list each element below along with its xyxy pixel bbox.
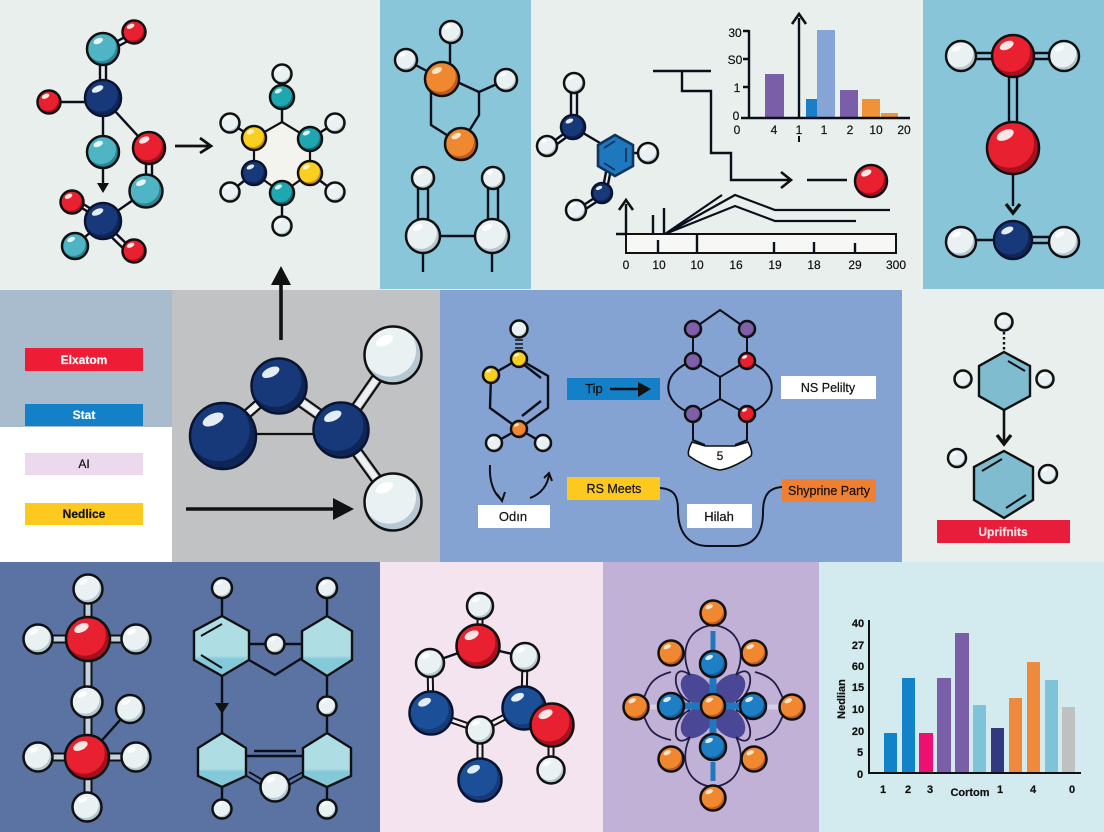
- axis labels: [728, 26, 911, 137]
- bars: [884, 633, 1075, 773]
- label: Hilah: Hilah: [704, 509, 734, 524]
- label: Tip with arrow: Tip: [585, 381, 603, 396]
- axis labels: 1: [880, 784, 886, 796]
- legend item: AI: AI: [78, 457, 90, 471]
- label: RS Meets: [567, 477, 660, 500]
- bar chart: top: [728, 14, 911, 142]
- line chart: bottom timeline: [616, 195, 906, 272]
- axis labels: 1: [734, 81, 741, 95]
- label: RS Meets: RS Meets: [587, 482, 641, 496]
- molecule: flow left ring: [482, 319, 551, 451]
- timeline labels: [623, 258, 906, 272]
- axis labels: 2: [905, 784, 911, 796]
- arrows: curved pair: [490, 465, 552, 501]
- panel: bottom pink background: [380, 562, 603, 832]
- axis labels: 15: [852, 682, 864, 694]
- label: Uprifnits: [937, 520, 1070, 543]
- axis labels: 20: [897, 123, 911, 137]
- label: Tip with arrow: [567, 378, 660, 400]
- molecule: large central navy and white: [188, 323, 422, 530]
- legend item: Elxatom: Elxatom: [61, 353, 107, 367]
- arrow: large right: [186, 498, 354, 520]
- axis labels: 4: [1030, 784, 1037, 796]
- molecule: six-membered ring: [220, 63, 344, 236]
- legend item: Nedlice: Nedlice: [63, 507, 106, 521]
- numbered shield: [688, 442, 752, 470]
- panel: blue flow background: [440, 290, 902, 562]
- label: Odin: Odın: [499, 509, 527, 524]
- axis labels: 1: [821, 123, 828, 137]
- timeline labels: 18: [807, 258, 821, 272]
- label: Hilah: [687, 504, 752, 528]
- panel: bottom chart background: [819, 562, 1104, 832]
- axis labels: 1: [796, 123, 803, 137]
- axis labels: 20: [852, 726, 864, 738]
- panel: right pale background: [902, 289, 1104, 562]
- axis labels: 0: [1069, 784, 1075, 796]
- bar chart: bottom right: [836, 618, 1081, 799]
- axis labels: 4: [771, 123, 778, 137]
- panel: legend lower background: [0, 427, 172, 562]
- label: Uprifnits: Uprifnits: [978, 525, 1028, 539]
- molecule: flow fused ring: [668, 310, 772, 470]
- label: NS Pelilty: NS Pelilty: [801, 381, 856, 395]
- timeline labels: 29: [848, 258, 862, 272]
- panel: top left background: [0, 0, 380, 290]
- molecule: purple panel radial complex: [623, 599, 804, 810]
- timeline labels: 16: [729, 258, 743, 272]
- legend item: Elxatom: [25, 348, 143, 371]
- legend item: Nedlice: [25, 503, 143, 525]
- axis labels: Cortom: [950, 787, 990, 799]
- axes: [741, 14, 910, 142]
- panel: bottom purple background: [603, 562, 819, 832]
- axis labels: 3: [927, 784, 933, 796]
- molecule: right lower ring: [947, 448, 1057, 518]
- axis labels: 0: [733, 109, 740, 123]
- axis labels: S0: [728, 53, 743, 67]
- axis labels: Nedlian: [836, 679, 848, 719]
- axis labels: 40: [852, 618, 864, 630]
- timeline labels: 300: [886, 258, 906, 272]
- panel: legend upper background: [0, 290, 172, 427]
- panel: top chart background: [531, 0, 923, 289]
- bars: [765, 30, 898, 118]
- timeline labels: 10: [652, 258, 666, 272]
- numbered shield: 5: [717, 449, 724, 463]
- legend: colour tags: [25, 348, 143, 525]
- legend item: Stat: [25, 404, 143, 426]
- axis labels: 2: [847, 123, 854, 137]
- arrow: stepped connector to red atom: [653, 71, 887, 197]
- axis labels: 5: [857, 747, 863, 759]
- molecule: top right vertical: [945, 32, 1079, 259]
- arrow: down in left molecule: [97, 168, 109, 193]
- panel: top right teal background: [923, 0, 1104, 289]
- molecule: top left branched: [37, 19, 165, 263]
- arrow: right between molecules: [175, 138, 211, 153]
- arrow: right panel down: [997, 410, 1011, 444]
- axis labels: 1: [997, 784, 1003, 796]
- legend item: AI: [25, 453, 143, 475]
- timeline labels: 0: [623, 258, 630, 272]
- axis labels: 0: [857, 769, 863, 781]
- molecule: orange atoms on teal: [394, 20, 517, 272]
- molecule: bottom left red and white: [22, 573, 150, 822]
- molecule: right upper ring: [954, 312, 1054, 410]
- panel: bottom navy background: [0, 562, 380, 832]
- label: Shyprine Party: Shyprine Party: [788, 484, 871, 498]
- timeline labels: 19: [768, 258, 782, 272]
- axis labels: 27: [852, 640, 864, 652]
- label: Odin: [478, 505, 550, 528]
- connector: curved link: [660, 487, 782, 546]
- axis labels: 30: [728, 26, 742, 40]
- timeline labels: 10: [690, 258, 704, 272]
- panel: centre gray background: [172, 290, 440, 562]
- axis labels: 10: [852, 704, 864, 716]
- axes: [869, 620, 1081, 773]
- axis labels: 0: [734, 123, 741, 137]
- molecule: pink panel: [408, 591, 574, 802]
- panel: top teal background: [380, 0, 531, 289]
- axis labels: 60: [852, 661, 864, 673]
- axis labels: 10: [869, 123, 883, 137]
- arrow: large up: [271, 266, 291, 340]
- label: NS Pelilty: [781, 376, 876, 399]
- molecule: blue hexagon with atoms: [536, 72, 658, 220]
- legend item: Stat: Stat: [73, 408, 95, 422]
- label: Shyprine Party: [782, 479, 876, 502]
- axis labels: [836, 618, 1075, 799]
- molecule: bottom four hexagons: [194, 577, 352, 818]
